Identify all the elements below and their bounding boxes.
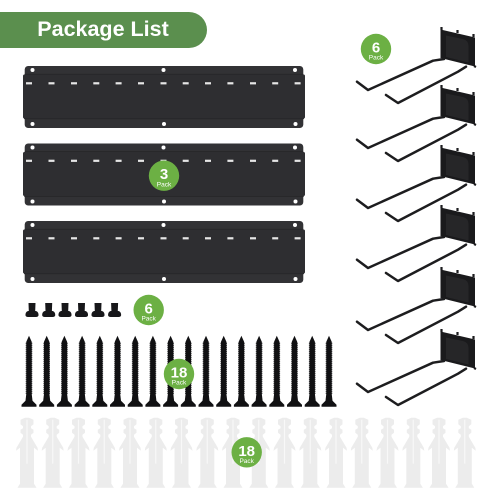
plate 3 bbox=[23, 221, 305, 283]
hook 6 bbox=[357, 329, 476, 405]
badge: 18 pack anchors bbox=[232, 437, 262, 467]
badge: 18 pack anchors: Pack bbox=[239, 458, 255, 465]
hook 4 bbox=[357, 205, 476, 281]
plate 1 bbox=[23, 66, 305, 128]
badge: 6 pack bolts bbox=[134, 295, 164, 325]
title banner: Package List bbox=[37, 17, 169, 41]
plate 2 bbox=[23, 144, 305, 206]
badge: 6 pack hooks: Pack bbox=[369, 54, 384, 62]
badge: 6 pack hooks bbox=[361, 34, 391, 64]
hook 2 bbox=[357, 85, 476, 161]
badge: 18 pack screws: 18 bbox=[171, 364, 187, 382]
badge: 3 pack: Pack bbox=[157, 182, 172, 188]
panel: wall anchors bbox=[16, 418, 476, 488]
badge: 6 pack bolts: Pack bbox=[141, 316, 157, 322]
badge: 3 pack: 3 bbox=[160, 166, 168, 183]
hook 5 bbox=[357, 267, 476, 343]
hook 1 bbox=[357, 27, 476, 103]
panel: double hooks bbox=[357, 27, 476, 405]
badge: 18 pack screws: Pack bbox=[172, 380, 187, 386]
badge: 18 pack screws bbox=[164, 359, 194, 389]
badge: 6 pack bolts: 6 bbox=[145, 300, 153, 318]
title banner bbox=[0, 12, 207, 48]
panel: wall mounting plates bbox=[23, 66, 305, 283]
badge: 6 pack hooks: 6 bbox=[372, 40, 380, 56]
panel: screws bbox=[22, 336, 336, 407]
hook 3 bbox=[357, 145, 476, 221]
badge: 18 pack anchors: 18 bbox=[238, 443, 255, 460]
badge: 3 pack bbox=[149, 160, 179, 191]
panel: bolts bbox=[25, 295, 164, 325]
